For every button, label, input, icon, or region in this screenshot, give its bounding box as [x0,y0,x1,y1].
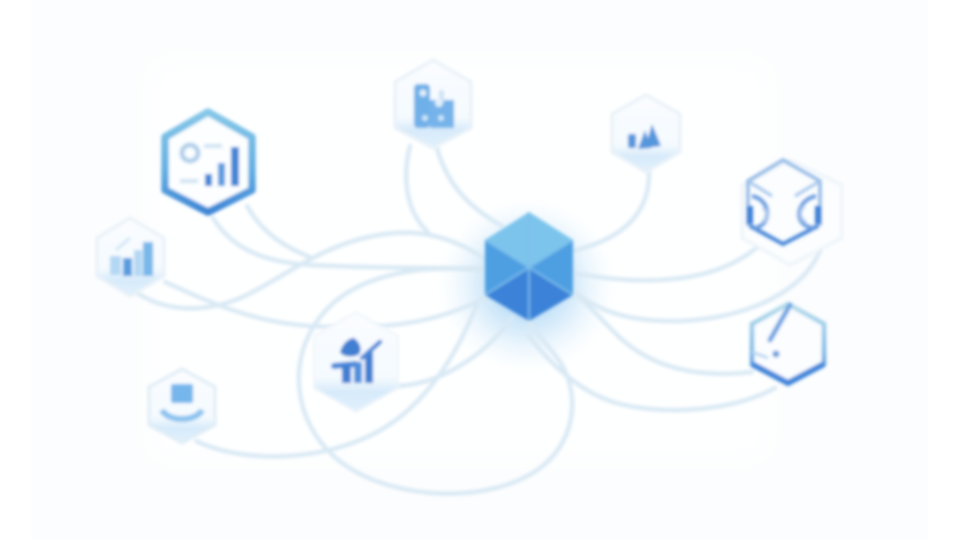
central glow [437,197,617,373]
icon: buildings [414,84,454,128]
icon: small bars [628,124,661,149]
hexagon node: chart left [97,218,164,296]
hexagon node: device lower left [149,369,215,443]
icon: stacked device [162,384,202,419]
hexagon node: buildings top centre [395,60,471,148]
hexagon node: cube outline right [748,160,820,244]
hexagon node: pale backing right [742,160,842,265]
icon: person and rising bars [334,338,380,383]
icon: pencil [752,305,790,358]
icon: gear and bars [180,145,239,186]
hexagon node: analytics top left [165,112,252,212]
icon: central cube [485,212,573,321]
hexagon node: small chart top right [612,95,680,172]
icon: bar chart [110,238,153,276]
hexagon node: pencil right [752,304,824,383]
hexagon node: growth chart centre [314,312,398,412]
connector lines [136,146,820,494]
